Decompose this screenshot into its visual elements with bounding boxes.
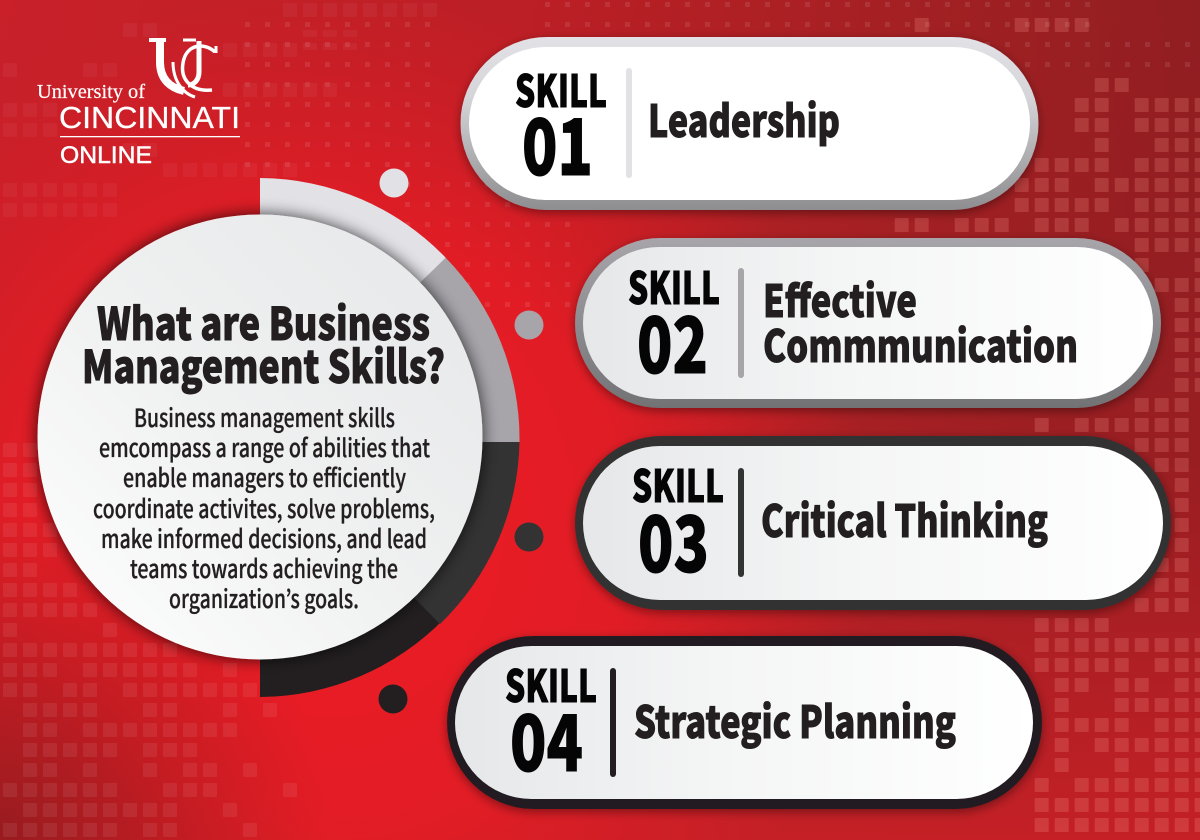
panel: skill 01	[460, 37, 1038, 210]
logo text: University of: University of	[37, 81, 145, 103]
panel: central circle	[38, 214, 482, 660]
panel: skill 03	[575, 436, 1171, 610]
logo text: CINCINNATI: CINCINNATI	[59, 101, 240, 135]
skill name: Critical Thinking	[761, 486, 1048, 550]
number: 02: 02	[637, 284, 708, 396]
heading: Management Skills?	[82, 331, 445, 396]
number: 01: 01	[522, 86, 593, 198]
panel: ring segments	[250, 178, 520, 697]
background small dots	[240, 0, 1200, 320]
description text: enable managers to efficiently	[123, 459, 406, 495]
panel: skill 02	[575, 238, 1161, 408]
description text: make informed decisions, and lead	[101, 520, 427, 556]
dot: dark gray	[514, 522, 544, 552]
pill frame	[575, 238, 1161, 408]
description text: Business management skills	[134, 399, 395, 435]
dot: light	[380, 168, 408, 198]
ring segment: gray	[250, 258, 520, 442]
panel: skill 04	[447, 636, 1042, 809]
pill face	[583, 247, 1153, 399]
skill name: Leadership	[648, 86, 840, 150]
description text: coordinate activites, solve problems,	[93, 490, 435, 526]
background pixel squares: lower left	[0, 440, 300, 840]
pill face	[455, 646, 1033, 799]
divider	[738, 268, 744, 378]
pill face	[469, 47, 1030, 200]
skill name: Effective	[763, 266, 917, 330]
pill frame	[447, 636, 1042, 809]
number: 03: 03	[638, 483, 709, 595]
dot: near black	[378, 684, 408, 714]
number: 04: 04	[510, 682, 583, 794]
skill name: Strategic Planning	[634, 687, 956, 751]
logo: University of Cincinnati Online	[37, 40, 240, 169]
logo text: ONLINE: ONLINE	[60, 142, 152, 169]
description text: emcompass a range of abilities that	[99, 429, 430, 465]
background pixel squares: upper left	[0, 0, 440, 220]
label: SKILL: SKILL	[505, 651, 597, 715]
ring segment: light	[260, 178, 446, 438]
heading: What are Business	[97, 288, 430, 353]
icon: UC monogram	[149, 40, 216, 97]
description text: teams towards achieving the	[130, 550, 398, 586]
divider	[610, 668, 616, 777]
skill name	[763, 266, 1078, 375]
logo rule	[60, 136, 240, 137]
dot: gray	[514, 310, 544, 340]
label: SKILL: SKILL	[515, 56, 607, 120]
description text	[93, 399, 435, 616]
ring segment: near black	[260, 442, 445, 697]
divider	[626, 68, 632, 178]
ring segment: dark gray	[260, 442, 520, 624]
label: SKILL: SKILL	[628, 253, 720, 317]
label: SKILL: SKILL	[632, 451, 724, 515]
pill frame	[575, 436, 1171, 610]
background pixel squares: right	[892, 15, 1200, 835]
description text: organization’s goals.	[169, 580, 359, 616]
divider	[738, 468, 744, 577]
heading	[82, 288, 445, 396]
pill face	[583, 446, 1163, 600]
skill name: Commmunication	[763, 311, 1078, 375]
pill frame	[460, 37, 1038, 210]
